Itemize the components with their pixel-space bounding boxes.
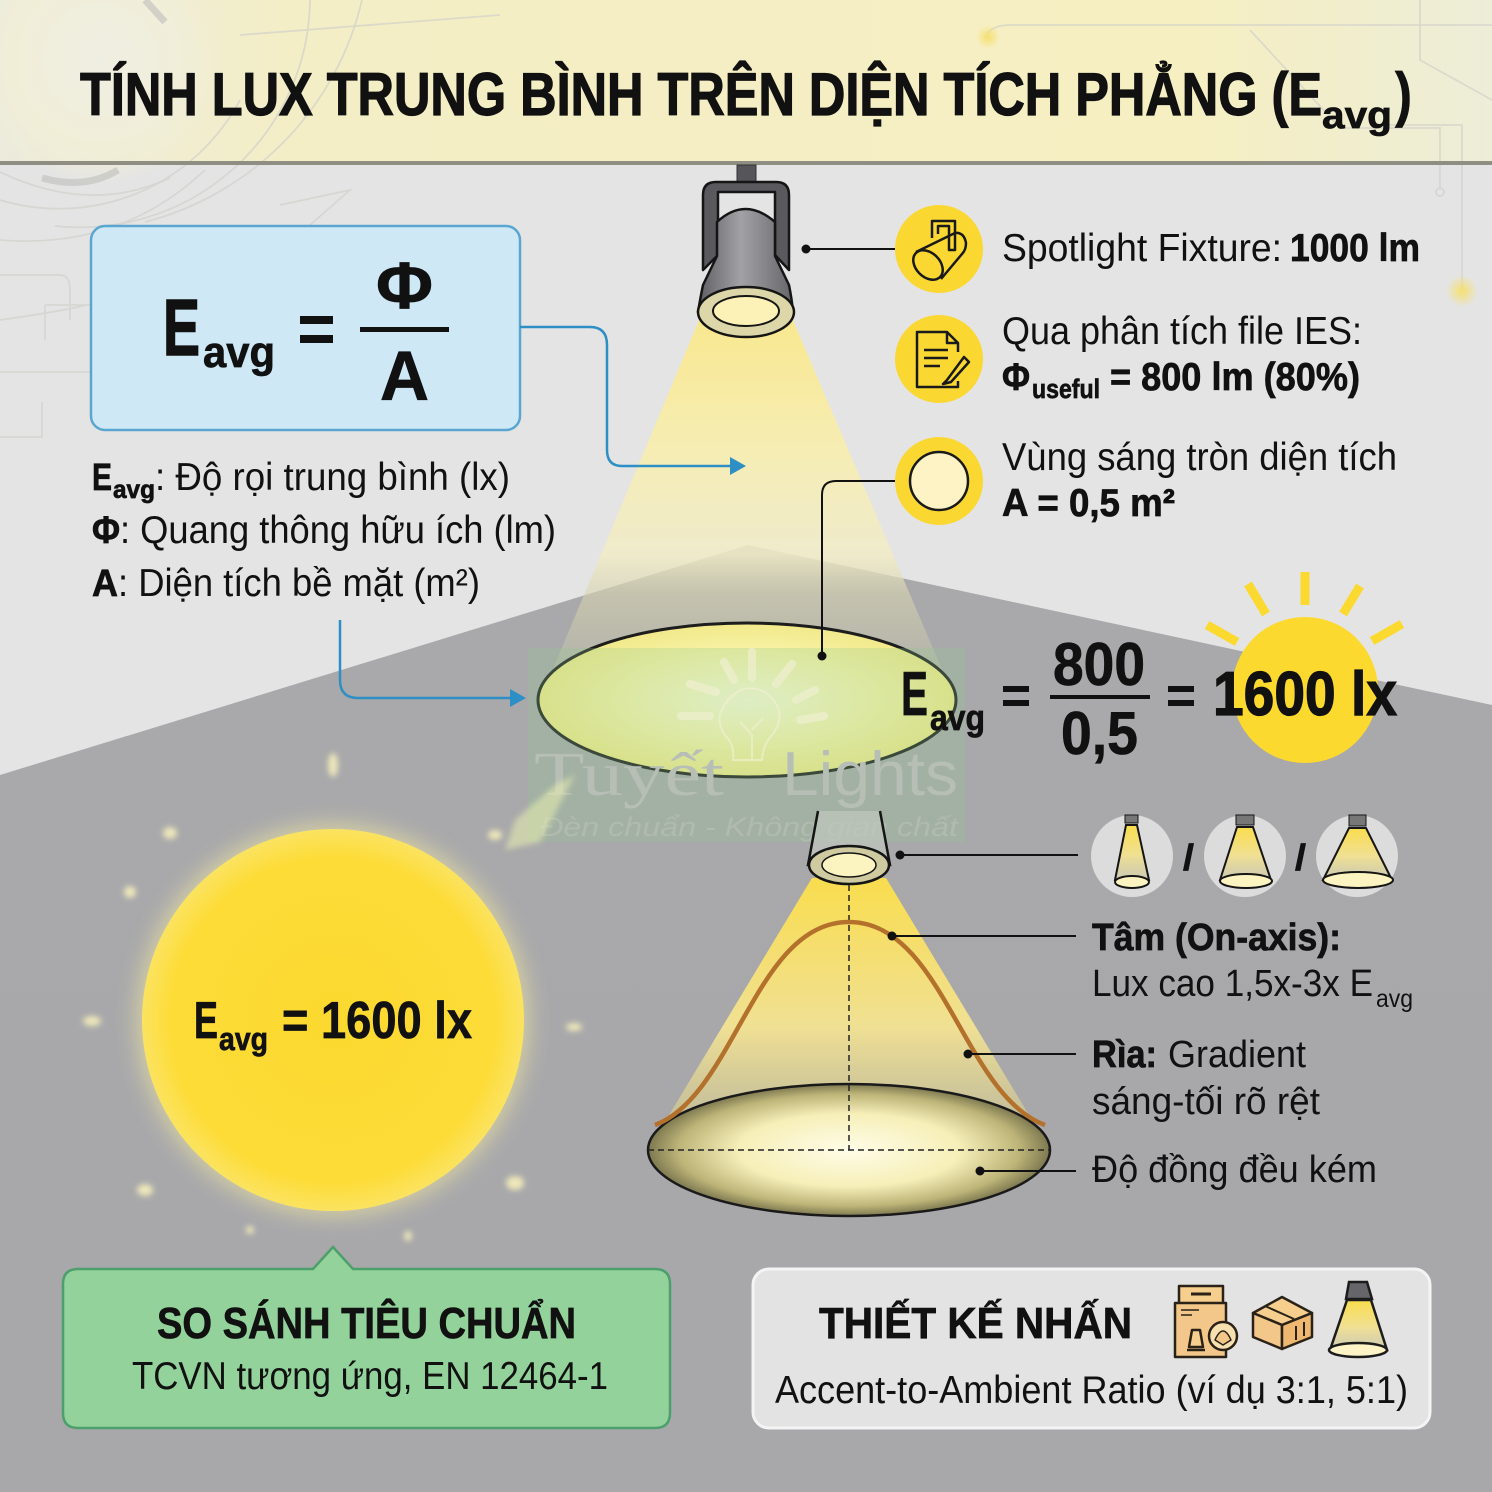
calculation: 800 — [1053, 631, 1145, 698]
title: ) — [1395, 61, 1412, 128]
panel: formula box — [91, 226, 520, 430]
big result circle: = 1600 lx — [282, 992, 472, 1050]
background circuit pattern — [0, 0, 1492, 437]
icon: document — [895, 315, 983, 403]
arrow: legend to light pool — [340, 620, 526, 707]
spec: spotlight fixture: 1000 lm — [1290, 227, 1420, 270]
spec: IES analysis: = 800 lm (80%) — [1110, 356, 1360, 399]
formula left side: avg — [203, 328, 275, 377]
light distribution curve — [655, 922, 1045, 1125]
icon: box — [1253, 1297, 1312, 1349]
formula legend: : Độ rọi trung bình (lx) — [155, 456, 510, 499]
decorative corner glow — [0, 0, 225, 185]
calculation: 1600 lx — [1213, 660, 1397, 729]
callout: edge: Gradient — [1168, 1034, 1306, 1076]
icon: spotlight — [895, 205, 983, 293]
watermark: Đèn chuẩn - Không gian chất — [540, 812, 960, 842]
lower spotlight beam — [648, 878, 1050, 1150]
icon: packaging card — [1175, 1286, 1237, 1357]
formula legend: Φ — [92, 510, 120, 552]
arrow: formula to beam — [520, 327, 746, 475]
formula legend: E — [92, 457, 112, 499]
spec: spotlight fixture — [802, 205, 1420, 293]
formula legend: : Diện tích bề mặt (m²) — [118, 562, 480, 605]
formula fraction: Φ — [376, 248, 433, 322]
big result circle: avg — [219, 1021, 268, 1057]
light streak — [505, 775, 575, 850]
callout: edge: sáng-tối rõ rệt — [1092, 1081, 1320, 1123]
formula legend: avg — [113, 476, 155, 504]
header divider — [0, 161, 1492, 165]
calculation — [901, 631, 1397, 767]
watermark — [528, 648, 965, 842]
lower light pool — [648, 1084, 1050, 1216]
panel: standards comparison — [63, 1247, 670, 1428]
panel: standards comparison: SO SÁNH TIÊU CHUẨN — [157, 1297, 576, 1348]
icon: medium beam — [1204, 815, 1286, 897]
panel: standards comparison: TCVN tương ứng, EN 12464-1 — [132, 1355, 608, 1398]
formula legend: A — [92, 563, 118, 605]
header band — [0, 0, 1492, 162]
background floor — [0, 545, 1492, 1492]
spec: circular lit area: Vùng sáng tròn diện tích — [1002, 436, 1397, 479]
icon: narrow beam — [1091, 815, 1173, 897]
spec: IES analysis — [895, 310, 1362, 404]
formula legend — [92, 456, 556, 605]
spec: IES analysis: useful — [1032, 374, 1100, 404]
big result circle — [83, 753, 582, 1241]
spec: circular lit area: A = 0,5 m² — [1002, 482, 1175, 525]
glow dots — [976, 25, 1478, 307]
calculation: 0,5 — [1061, 700, 1138, 767]
callout: on-axis: Tâm (On-axis): — [1092, 917, 1341, 959]
formula legend: : Quang thông hữu ích (lm) — [120, 509, 556, 552]
panel: accent design: THIẾT KẾ NHẤN — [819, 1298, 1132, 1348]
light beam from spotlight — [540, 318, 955, 700]
spec: circular lit area — [818, 436, 1397, 660]
callout: uniformity — [976, 1149, 1377, 1191]
pool of light on the floor — [538, 623, 956, 777]
formula fraction — [360, 248, 449, 415]
watermark: Tuyết — [534, 741, 724, 809]
callout: edge — [964, 1034, 1320, 1123]
big result circle: E — [194, 992, 218, 1050]
calculation: E — [901, 660, 928, 729]
icon: circle — [895, 437, 983, 525]
callout: edge: Rìa: — [1092, 1034, 1157, 1076]
beam axes — [648, 885, 1050, 1150]
callout: uniformity: Độ đồng đều kém — [1092, 1149, 1377, 1191]
formula left side: E — [163, 283, 200, 372]
callout: on-axis — [888, 917, 1413, 1013]
watermark: Lights — [782, 740, 958, 809]
spec: spotlight fixture: Spotlight Fixture: — [1002, 227, 1282, 270]
spec: IES analysis: Qua phân tích file IES: — [1002, 310, 1362, 353]
spotlight fixture — [698, 165, 794, 337]
spec: IES analysis: Φ — [1002, 357, 1030, 399]
formula fraction: A — [380, 337, 429, 415]
formula left side — [163, 283, 333, 377]
calculation: avg — [930, 697, 985, 738]
title: avg — [1322, 95, 1392, 137]
panel: accent design — [753, 1269, 1430, 1428]
icon: wide beam — [1316, 815, 1398, 897]
beam angle icons — [896, 815, 1398, 897]
lower spotlight — [808, 811, 890, 884]
icon: sun — [1207, 572, 1402, 763]
panel: accent design: Accent-to-Ambient Ratio (ví dụ 3:1, 5:1) — [775, 1369, 1408, 1412]
callout: on-axis: Lux cao 1,5x-3x E — [1092, 963, 1373, 1005]
callout: on-axis: avg — [1376, 985, 1413, 1013]
beam angle icons: / — [1295, 837, 1306, 878]
sparkles — [83, 753, 582, 1241]
watermark bulb and rays — [681, 652, 824, 760]
beam angle icons: / — [1183, 837, 1194, 878]
icon: spot beam — [1329, 1282, 1387, 1357]
